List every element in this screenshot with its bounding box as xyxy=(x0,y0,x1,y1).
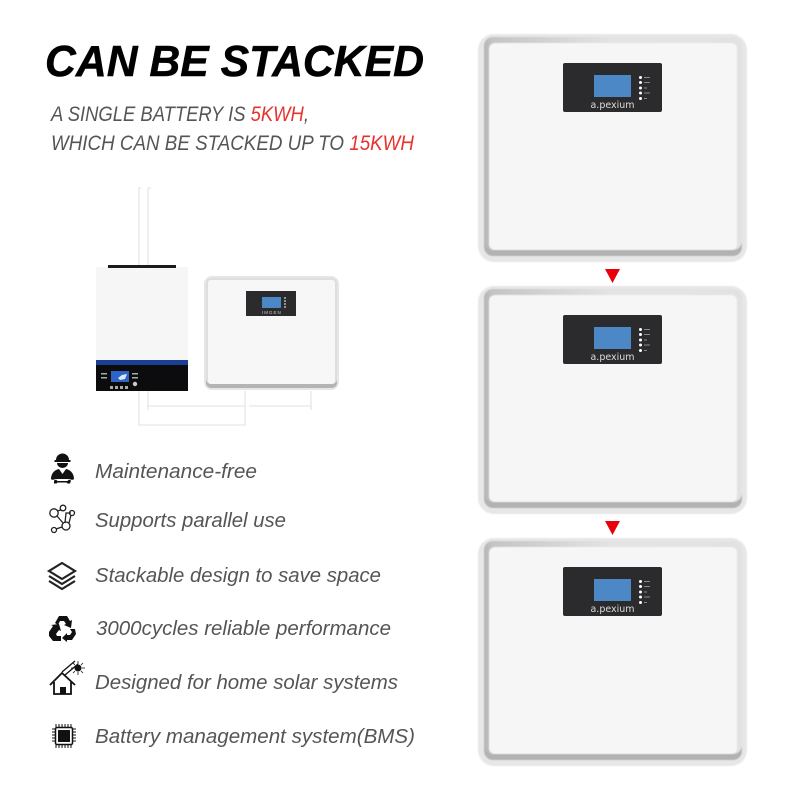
text: stackable: Stackable design to save space xyxy=(95,564,381,587)
small battery xyxy=(204,276,339,390)
text: cycles: 3000cycles reliable performance xyxy=(96,617,391,640)
subtitle: A SINGLE BATTERY IS 5KWH, xyxy=(49,102,309,126)
text: maintenance: Maintenance-free xyxy=(95,460,257,483)
brand label: a.pexium xyxy=(590,352,634,363)
battery 2 xyxy=(478,286,747,514)
system diagram: inverter and battery with cables xyxy=(96,188,339,425)
brand label: a.pexium xyxy=(590,604,634,615)
text: solar: Designed for home solar systems xyxy=(95,671,398,694)
brand label: a.pexium xyxy=(590,100,634,111)
icon: layers xyxy=(49,563,75,589)
battery 1 xyxy=(478,34,747,262)
feature list xyxy=(49,454,415,748)
small battery: IMGEN xyxy=(262,310,282,315)
icon: network nodes xyxy=(50,505,74,532)
title: CAN BE STACKED xyxy=(45,37,424,86)
text: parallel: Supports parallel use xyxy=(95,509,286,532)
arrow 2 xyxy=(605,521,620,535)
icon: recycle xyxy=(49,616,76,642)
battery 3 xyxy=(478,538,747,766)
text: BMS: Battery management system(BMS) xyxy=(95,725,415,748)
inverter xyxy=(96,265,188,391)
subtitle xyxy=(49,102,414,155)
arrow 1 xyxy=(605,269,620,283)
cables xyxy=(139,188,311,425)
icon: worker xyxy=(51,454,74,484)
icon: solar home xyxy=(50,661,85,694)
subtitle: WHICH CAN BE STACKED UP TO 15KWH xyxy=(51,131,414,155)
icon: chip xyxy=(52,724,76,748)
